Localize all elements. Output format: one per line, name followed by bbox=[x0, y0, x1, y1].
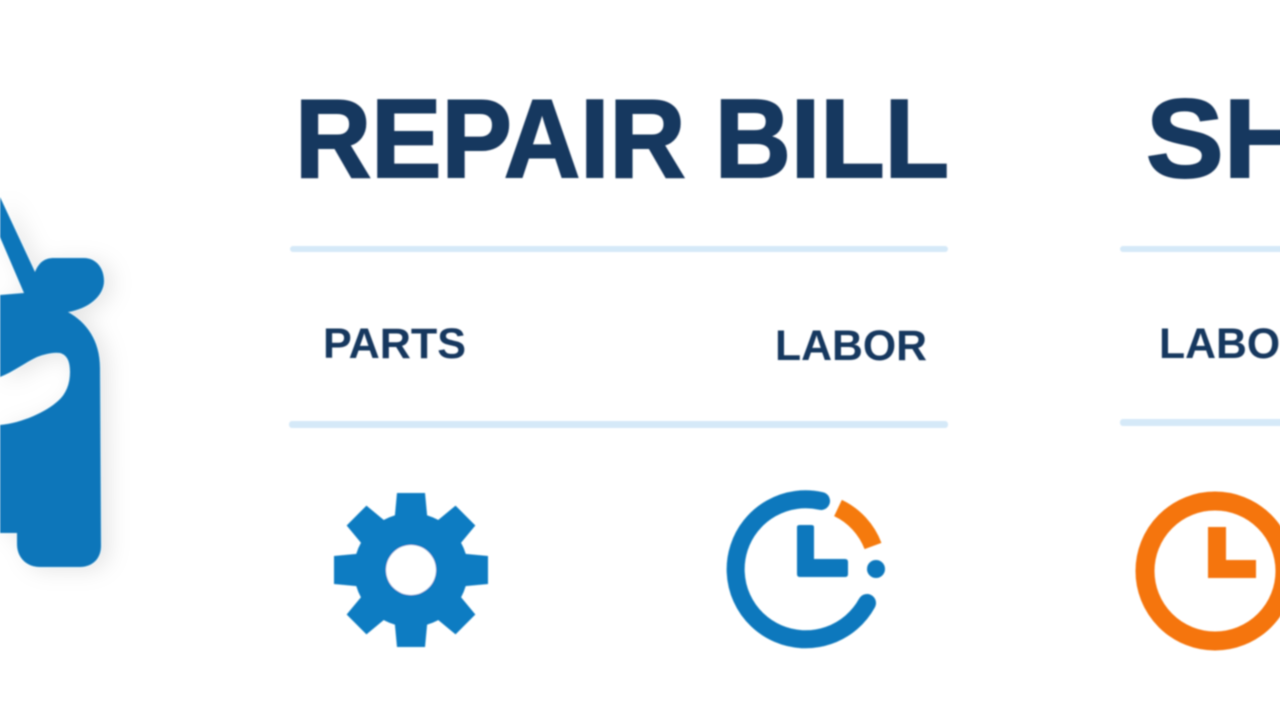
icon: orange clock bbox=[1145, 501, 1280, 641]
column: shop, cropped at right edge bbox=[1120, 77, 1280, 641]
label: labor: LABOR bbox=[775, 322, 927, 370]
column: repair bill bbox=[289, 77, 949, 647]
icon: clock with orange segment bbox=[736, 499, 885, 639]
label: parts: PARTS bbox=[323, 320, 466, 368]
heading: repair bill: REPAIR BILL bbox=[295, 77, 949, 201]
icon: car, front view, cropped at left edge bbox=[0, 197, 104, 567]
icon: gear bbox=[334, 493, 488, 647]
